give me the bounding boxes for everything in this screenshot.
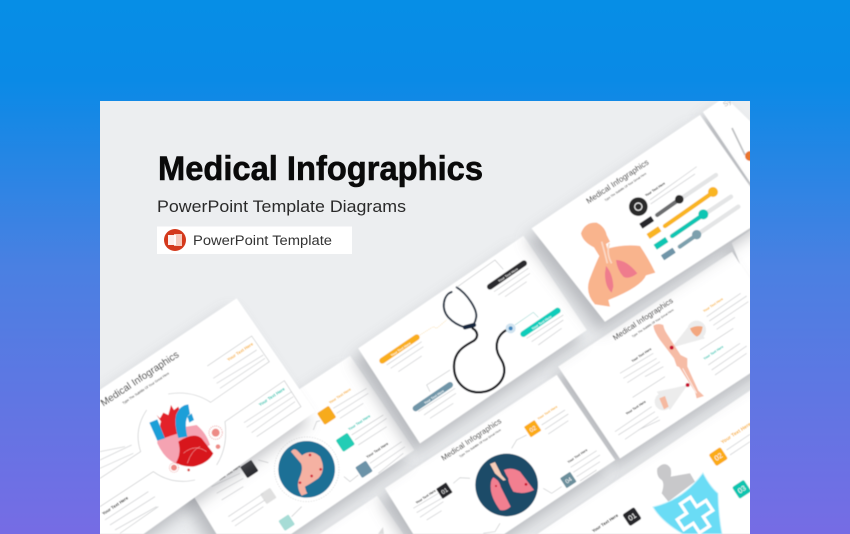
- title: Medical Infographics: [439, 416, 503, 463]
- icon: dark badge: [629, 197, 648, 216]
- pill: slate: [416, 385, 450, 408]
- icon: heart: [149, 404, 213, 467]
- step badge 02: [709, 447, 728, 466]
- card: lungs circle: Your Text Here: [567, 448, 588, 464]
- card: bone: Your Text Here: [703, 345, 724, 361]
- label dark: Your Text Here: [591, 512, 620, 533]
- slider bars: [657, 175, 738, 247]
- icon: human torso: [581, 223, 655, 307]
- card: stomach: Your Text Here: [348, 414, 371, 431]
- step badge 01: [436, 482, 453, 499]
- icon: stomach circle: [274, 437, 339, 502]
- card: small bottom partial: [320, 496, 403, 534]
- subtitle: Type The Subtitle Of Your Great Here: [458, 428, 502, 458]
- card: heart: Your Text Here: [258, 386, 286, 407]
- subtitle: Type The Subtitle Of Your Great Here: [631, 308, 675, 338]
- magnifier cones: [655, 321, 706, 410]
- connectors: [457, 260, 503, 287]
- labels: Your Text Here: [328, 387, 352, 405]
- label: Your Text Here: [644, 181, 666, 197]
- text lines: [100, 350, 295, 530]
- icon: medical shield: [653, 473, 722, 534]
- step badge 01: 01: [441, 487, 450, 496]
- badge: PowerPoint Template: [157, 226, 352, 254]
- value tags: [639, 216, 676, 260]
- labels: Your Text Here: [702, 297, 724, 313]
- card: bone: Your Text Here: [631, 347, 652, 363]
- card: top right partial: [698, 101, 750, 186]
- label orange: Your Text Here: [720, 421, 753, 446]
- card: bone: [558, 252, 794, 458]
- card: small right partial: [723, 231, 750, 279]
- title: Medical Infographics: [584, 158, 651, 206]
- pill: dark: Your Text Here: [497, 267, 519, 283]
- card: top right partial: Sy: [722, 98, 733, 109]
- title: Medical Infographics: [611, 296, 675, 342]
- icon: lungs: [474, 452, 539, 518]
- labels: Your Text Here: [226, 341, 255, 362]
- card: lungs circle: Your Text Here: [415, 489, 437, 505]
- card: heart: Your Text Here: [101, 495, 130, 516]
- step tiles: [240, 406, 373, 531]
- icon: PowerPoint logo: [164, 229, 186, 251]
- pill: teal: Your Text Here: [531, 315, 553, 331]
- slide cards group: [100, 101, 750, 534]
- text lines: [650, 167, 697, 204]
- pill: orange: Your Text Here: [390, 341, 412, 357]
- title: Medical Infographics: [99, 349, 181, 409]
- badge: PowerPoint Template: PowerPoint Template: [193, 233, 332, 248]
- text lines: [212, 388, 405, 526]
- icon: virus particles: [169, 426, 222, 472]
- step badge 03: 03: [736, 483, 748, 495]
- card: lungs circle: [385, 375, 615, 534]
- connectors: [258, 421, 358, 517]
- card: bone: Your Text Here: [625, 400, 647, 416]
- step badge 04: [560, 472, 577, 488]
- step badge 04: 04: [565, 476, 574, 485]
- step badge 01: 01: [626, 511, 638, 523]
- title: Medical Infographics: [158, 150, 483, 188]
- subtitle: Type The Subtitle Of Your Great Here: [604, 171, 647, 202]
- text lines: [387, 268, 563, 418]
- text lines: [615, 293, 748, 439]
- heading block: [157, 150, 483, 254]
- icon: person silhouette: [657, 464, 695, 502]
- connectors: [453, 435, 562, 533]
- pill: slate: Your Text Here: [423, 389, 445, 405]
- panel: grey stage: [100, 101, 750, 534]
- icon: stethoscope: [444, 287, 516, 392]
- pill: orange: [382, 337, 417, 361]
- pill: dark: [490, 263, 524, 287]
- labels: Your Text Here: [537, 405, 558, 421]
- subtitle: PowerPoint Template Diagrams: [157, 198, 406, 216]
- step badge 02: 02: [713, 451, 724, 463]
- connector frames: [100, 336, 301, 533]
- card: stethoscope: [358, 236, 587, 443]
- step badge 02: 02: [529, 425, 538, 434]
- card: respiratory: [532, 115, 770, 322]
- card: heart: [70, 298, 315, 534]
- text lines: [413, 410, 600, 520]
- card: stomach: Your Text Here: [218, 464, 241, 482]
- step badge 03: [732, 480, 751, 499]
- card: stomach: [178, 356, 414, 534]
- card: stomach: Your Text Here: [366, 442, 389, 459]
- step badge 01: [622, 507, 642, 526]
- card: shield: [539, 391, 750, 534]
- step badge 02: [524, 420, 541, 437]
- body text lines: [727, 434, 750, 455]
- subtitle: Type The Subtitle Of Your Great Here: [122, 371, 170, 405]
- icon: arm bone: [653, 324, 704, 398]
- pill: teal: [523, 311, 558, 334]
